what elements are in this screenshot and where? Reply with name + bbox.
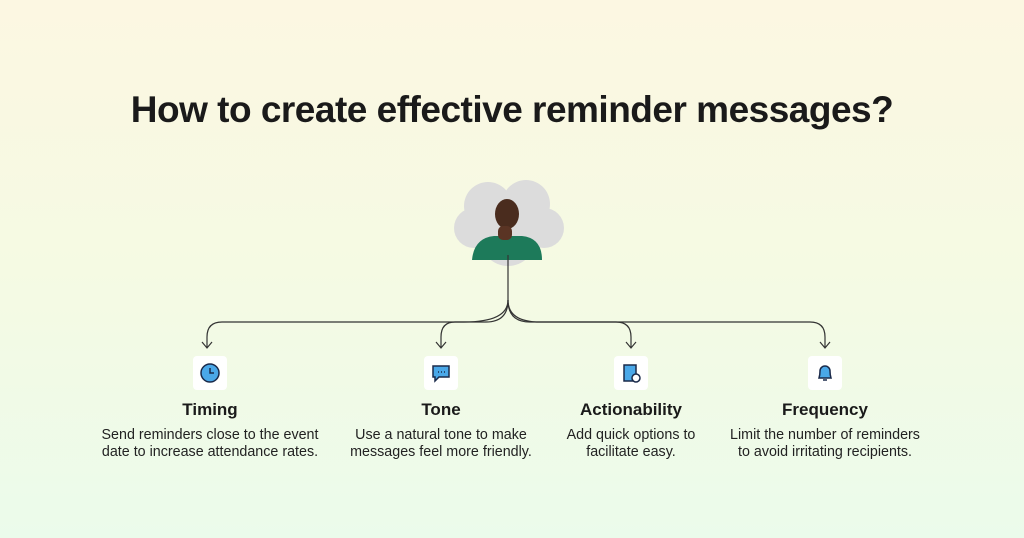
illustration: thinking person in cloud	[454, 180, 564, 266]
column: Tone: Tone	[421, 400, 461, 419]
column: Tone: messages feel more friendly.	[350, 444, 532, 460]
column: Frequency	[730, 356, 920, 460]
column: Actionability: facilitate easy.	[586, 444, 676, 460]
column: Frequency: Limit the number of reminders	[730, 427, 920, 443]
column: Timing	[102, 356, 318, 460]
icon: bell	[808, 356, 842, 390]
column: Actionability: Actionability	[580, 400, 682, 419]
icon: chat	[424, 356, 458, 390]
column: Timing: date to increase attendance rates.	[102, 444, 318, 460]
column: Frequency: to avoid irritating recipients.	[738, 444, 912, 460]
column: Tone: Use a natural tone to make	[355, 427, 527, 443]
title: How to create effective reminder messages?	[131, 89, 893, 130]
column: Timing: Send reminders close to the event	[102, 427, 318, 443]
icon: clock	[193, 356, 227, 390]
column: Actionability: Add quick options to	[567, 427, 695, 443]
column: Tone	[350, 356, 532, 460]
column: Frequency: Frequency	[782, 400, 868, 419]
icon: clipboard	[614, 356, 648, 390]
column: Timing: Timing	[182, 400, 238, 419]
column: Actionability	[566, 356, 695, 460]
